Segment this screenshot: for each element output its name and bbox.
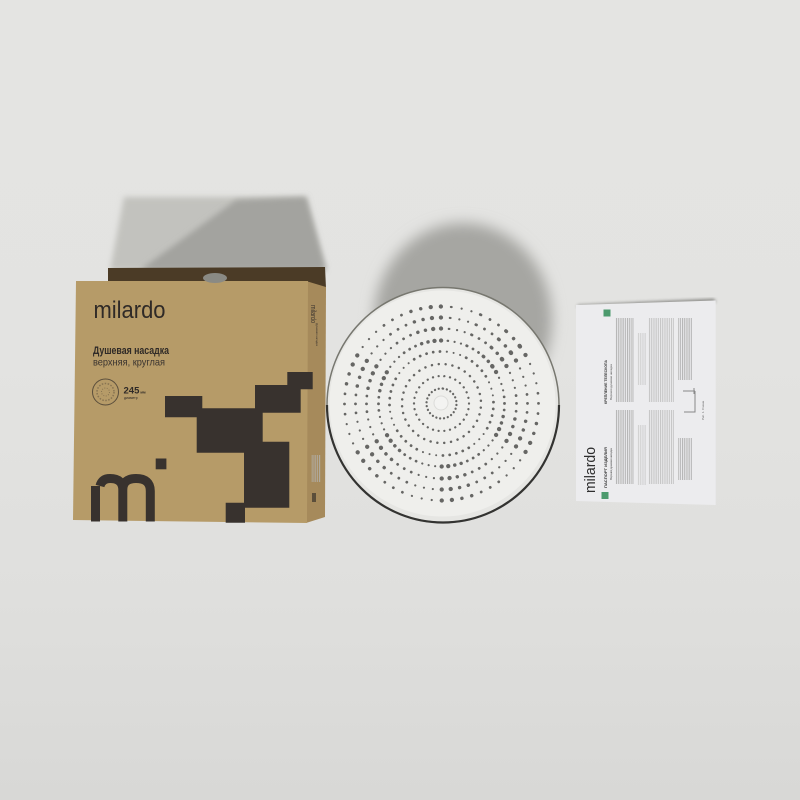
rim dark lower edge (327, 405, 559, 522)
leaflet logo: milardo (582, 447, 599, 493)
box side logo: milardo (309, 305, 316, 323)
shadow of box (110, 197, 326, 270)
box side description: Душевая насадка (315, 323, 319, 346)
icon: shower head diameter (92, 379, 118, 405)
panel: kraft box (73, 267, 326, 523)
leaflet heading: right page: КРЕПЛЕНИЕ ТЕЛЕСКОПА (603, 360, 608, 404)
leaflet subheading left: Верхняя душевая насадка (609, 448, 613, 480)
box title: Душевая насадка (93, 345, 170, 357)
box side panel (306, 281, 326, 523)
diameter caption: диаметр (124, 396, 138, 400)
flap notch (203, 273, 227, 283)
box logo: milardo: milardo (94, 297, 166, 324)
leaflet green badges (602, 310, 610, 499)
diameter value: 245 мм (124, 386, 146, 396)
box pixel pattern (165, 372, 313, 523)
panel: shower head (305, 267, 578, 540)
leaflet sheet (576, 300, 716, 505)
center hub (434, 396, 448, 410)
box front face (73, 281, 308, 523)
shadow of shower head (374, 223, 552, 417)
leaflet subheading right: Верхняя душевая насадка (609, 364, 613, 400)
water holes (305, 267, 578, 540)
panel: instruction leaflet (576, 299, 716, 505)
shower head face (330, 290, 556, 516)
leaflet figure caption: Рис. 1. Схема (701, 400, 705, 420)
box subtitle: верхняя, круглая (93, 356, 165, 368)
box side code (312, 493, 316, 502)
leaflet text columns (615, 318, 692, 485)
leaflet heading: passport: ПАСПОРТ ИЗДЕЛИЯ (603, 447, 608, 488)
leaflet shadow (577, 299, 716, 307)
leaflet diagram (683, 388, 695, 412)
box side small print (311, 455, 321, 482)
box large m mark (96, 458, 166, 522)
box back flap (108, 267, 326, 288)
shower head rim (327, 288, 559, 522)
